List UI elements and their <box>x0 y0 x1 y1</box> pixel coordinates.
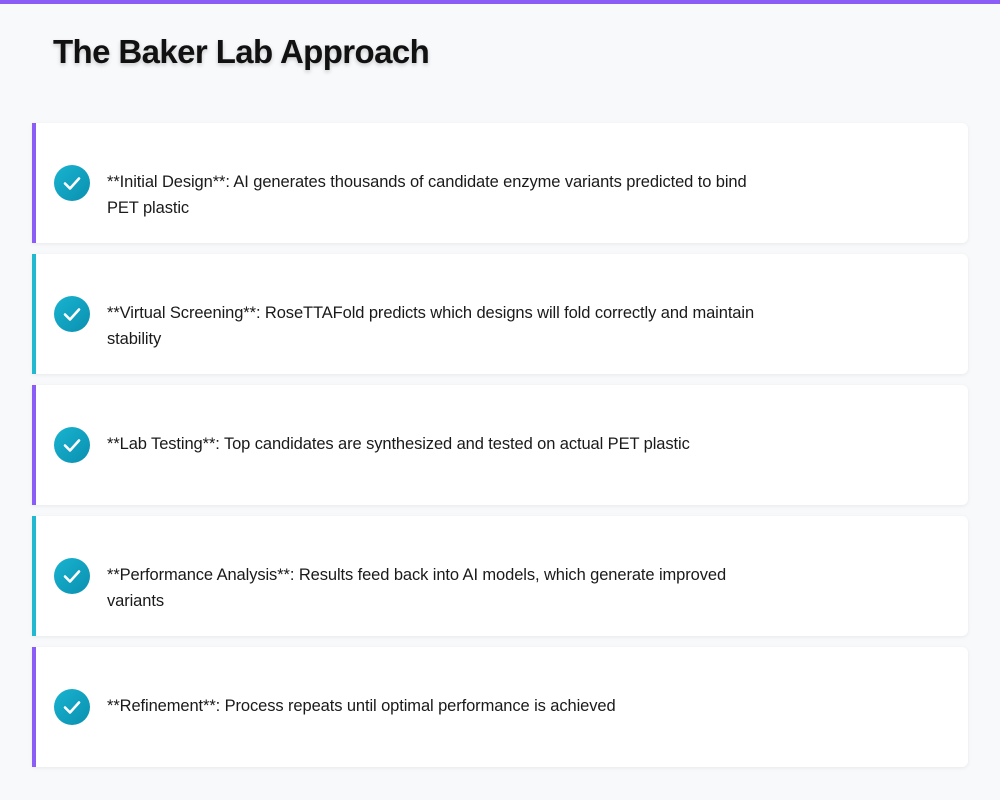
icon: check <box>54 296 90 332</box>
card: refinement <box>32 647 968 767</box>
text: **Performance Analysis**: Results feed back into AI models, which generate improved variants <box>107 566 726 610</box>
title: The Baker Lab Approach <box>53 33 429 70</box>
text: **Virtual Screening**: RoseTTAFold predicts which designs will fold correctly and maintain stability <box>107 304 754 348</box>
icon: check <box>54 427 90 463</box>
card: virtual screening <box>32 254 968 374</box>
card: initial design <box>32 123 968 243</box>
card: lab testing <box>32 385 968 505</box>
text: **Refinement**: Process repeats until optimal performance is achieved <box>107 697 616 715</box>
icon: check <box>54 558 90 594</box>
icon: check <box>54 689 90 725</box>
icon: check <box>54 165 90 201</box>
text: **Lab Testing**: Top candidates are synthesized and tested on actual PET plastic <box>107 435 690 453</box>
card: performance analysis <box>32 516 968 636</box>
text: **Initial Design**: AI generates thousands of candidate enzyme variants predicted to bind PET plastic <box>107 173 747 217</box>
